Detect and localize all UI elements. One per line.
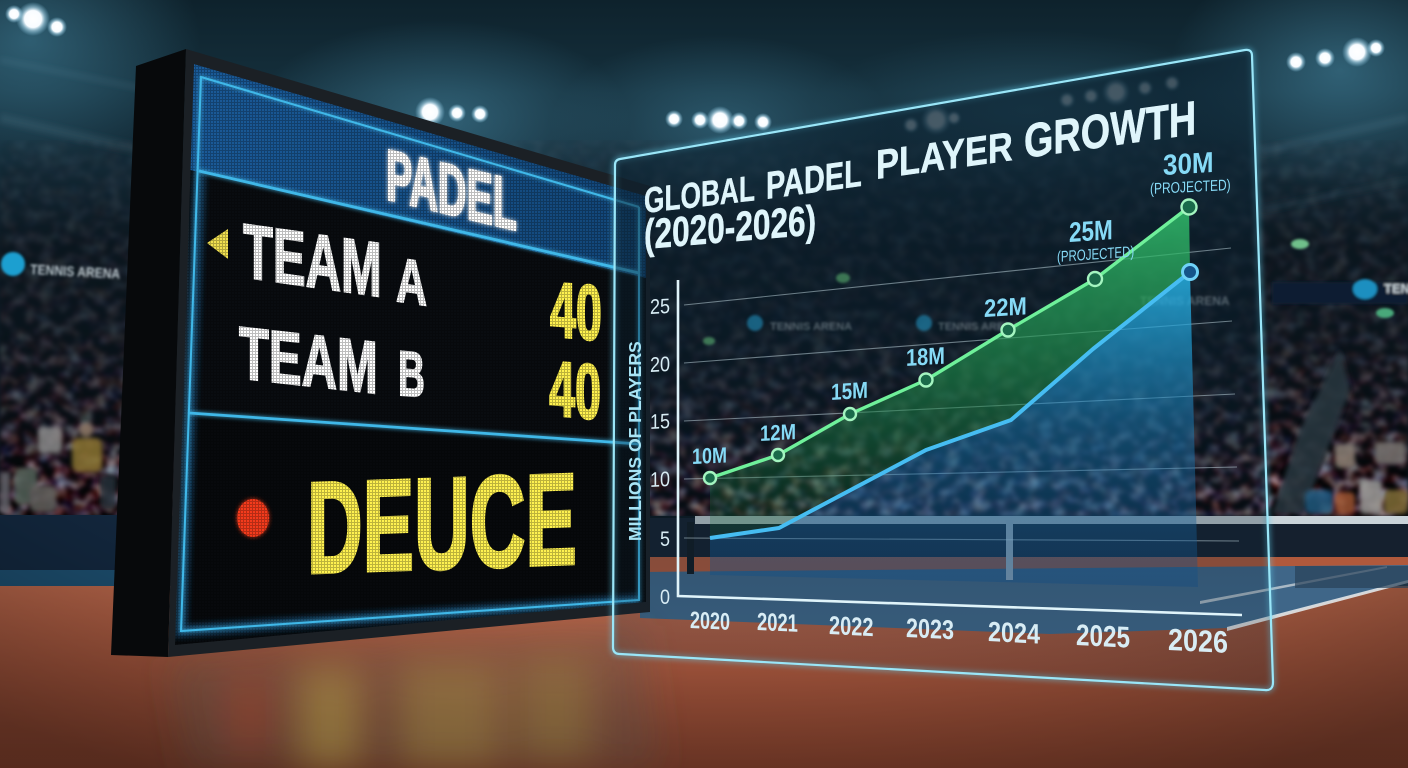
LED dot matrix overlay (176, 64, 646, 639)
projected notes: (PROJECTED) (1150, 175, 1231, 197)
screen text: PADEL: PADEL (386, 135, 517, 246)
axes (678, 280, 1242, 615)
screen text: TEAM B (238, 326, 424, 398)
x axis labels: 2020 (690, 608, 730, 635)
score Team B: 40 (549, 345, 601, 436)
stand aisle right (1272, 350, 1350, 514)
y axis labels: 15 (650, 410, 670, 434)
red status light (237, 499, 269, 537)
blurred sponsor signs seen through the pane (703, 273, 1230, 345)
spectators in the foreground of the right stand (1305, 442, 1408, 514)
blue end point (1182, 264, 1198, 280)
y axis labels: 10 (650, 468, 670, 492)
blue series line (710, 272, 1190, 538)
blurred sponsor sign: left: TENNIS ARENA (30, 261, 121, 282)
chart title (644, 92, 1196, 258)
green series line (710, 207, 1189, 478)
line chart (650, 146, 1242, 660)
blurred sponsor signs seen through the pane: TENNIS ARENA (770, 321, 852, 333)
y axis labels: 25 (650, 295, 670, 319)
projected notes (1057, 175, 1231, 265)
data value labels: 22M (984, 292, 1027, 322)
x axis labels: 2026 (1168, 623, 1228, 660)
screen text: TEAM B: TEAM (239, 312, 378, 410)
blurred sponsor sign: left (1, 252, 121, 282)
board front frame (168, 49, 650, 657)
screen text: TEAM B: B (398, 339, 425, 412)
blurred sponsor signs seen through the pane: TENNIS ARENA (938, 321, 1020, 333)
glass pane glow (613, 50, 1273, 690)
x axis labels: 2025 (1076, 618, 1130, 654)
data value labels: 15M (831, 378, 868, 405)
chart title: PLAYER (876, 124, 1013, 189)
board side casing (111, 49, 186, 657)
x axis labels: 2023 (906, 614, 954, 646)
x axis labels: 2022 (829, 610, 873, 642)
data value labels: 12M (760, 421, 796, 446)
x axis labels (690, 607, 1228, 660)
data value labels (692, 146, 1214, 469)
y axis labels: 5 (660, 528, 670, 551)
blurred sponsor signs seen through the pane: TENNIS ARENA (1140, 294, 1230, 308)
green data points (704, 200, 1196, 484)
score Team A: 40 (550, 266, 602, 357)
LED screen (175, 64, 646, 645)
blurred sponsor sign: right (1272, 239, 1408, 318)
projected notes: (PROJECTED) (1057, 243, 1134, 265)
green area (710, 207, 1190, 538)
y axis title: MILLIONS OF PLAYERS (625, 341, 645, 541)
blue area (710, 272, 1198, 587)
spectators in the foreground of the left stand (0, 423, 116, 512)
screen text: TEAM A: A (396, 245, 427, 320)
chart title: (2020-2026) (644, 196, 816, 258)
data value labels: 10M (692, 444, 727, 469)
x axis labels: 2024 (988, 617, 1041, 650)
blue light spill around the screen frame (181, 170, 639, 631)
blue court, back strip and lines (640, 518, 1408, 634)
y axis labels (650, 295, 670, 609)
y axis labels: 0 (660, 586, 670, 609)
gridlines (684, 248, 1239, 541)
data value labels: 30M (1163, 146, 1214, 181)
screen text: TEAM A (242, 223, 427, 306)
screen text: TEAM A: TEAM (243, 207, 382, 313)
tennis net (687, 516, 1408, 588)
screen dividing lines (181, 77, 639, 631)
dim blurred lights behind the glass chart (903, 75, 1180, 135)
chart title: PADEL (766, 152, 862, 208)
x axis labels: 2021 (757, 607, 798, 637)
chart title: GLOBAL (644, 167, 755, 221)
glass pane (613, 50, 1273, 690)
crowd stands (0, 140, 1408, 516)
glass chart panel (613, 50, 1273, 690)
turn indicator arrow (207, 229, 228, 259)
y axis labels: 20 (650, 353, 670, 377)
floor reflection of the scoreboard (170, 625, 660, 768)
data value labels: 18M (906, 342, 945, 371)
screen text: DEUCE: DEUCE (307, 446, 577, 601)
data value labels: 25M (1069, 215, 1113, 249)
chart title: GROWTH (1024, 92, 1196, 169)
left perimeter wall and strip (0, 515, 130, 590)
scoreboard (111, 49, 660, 660)
stadium lights (5, 2, 1385, 134)
